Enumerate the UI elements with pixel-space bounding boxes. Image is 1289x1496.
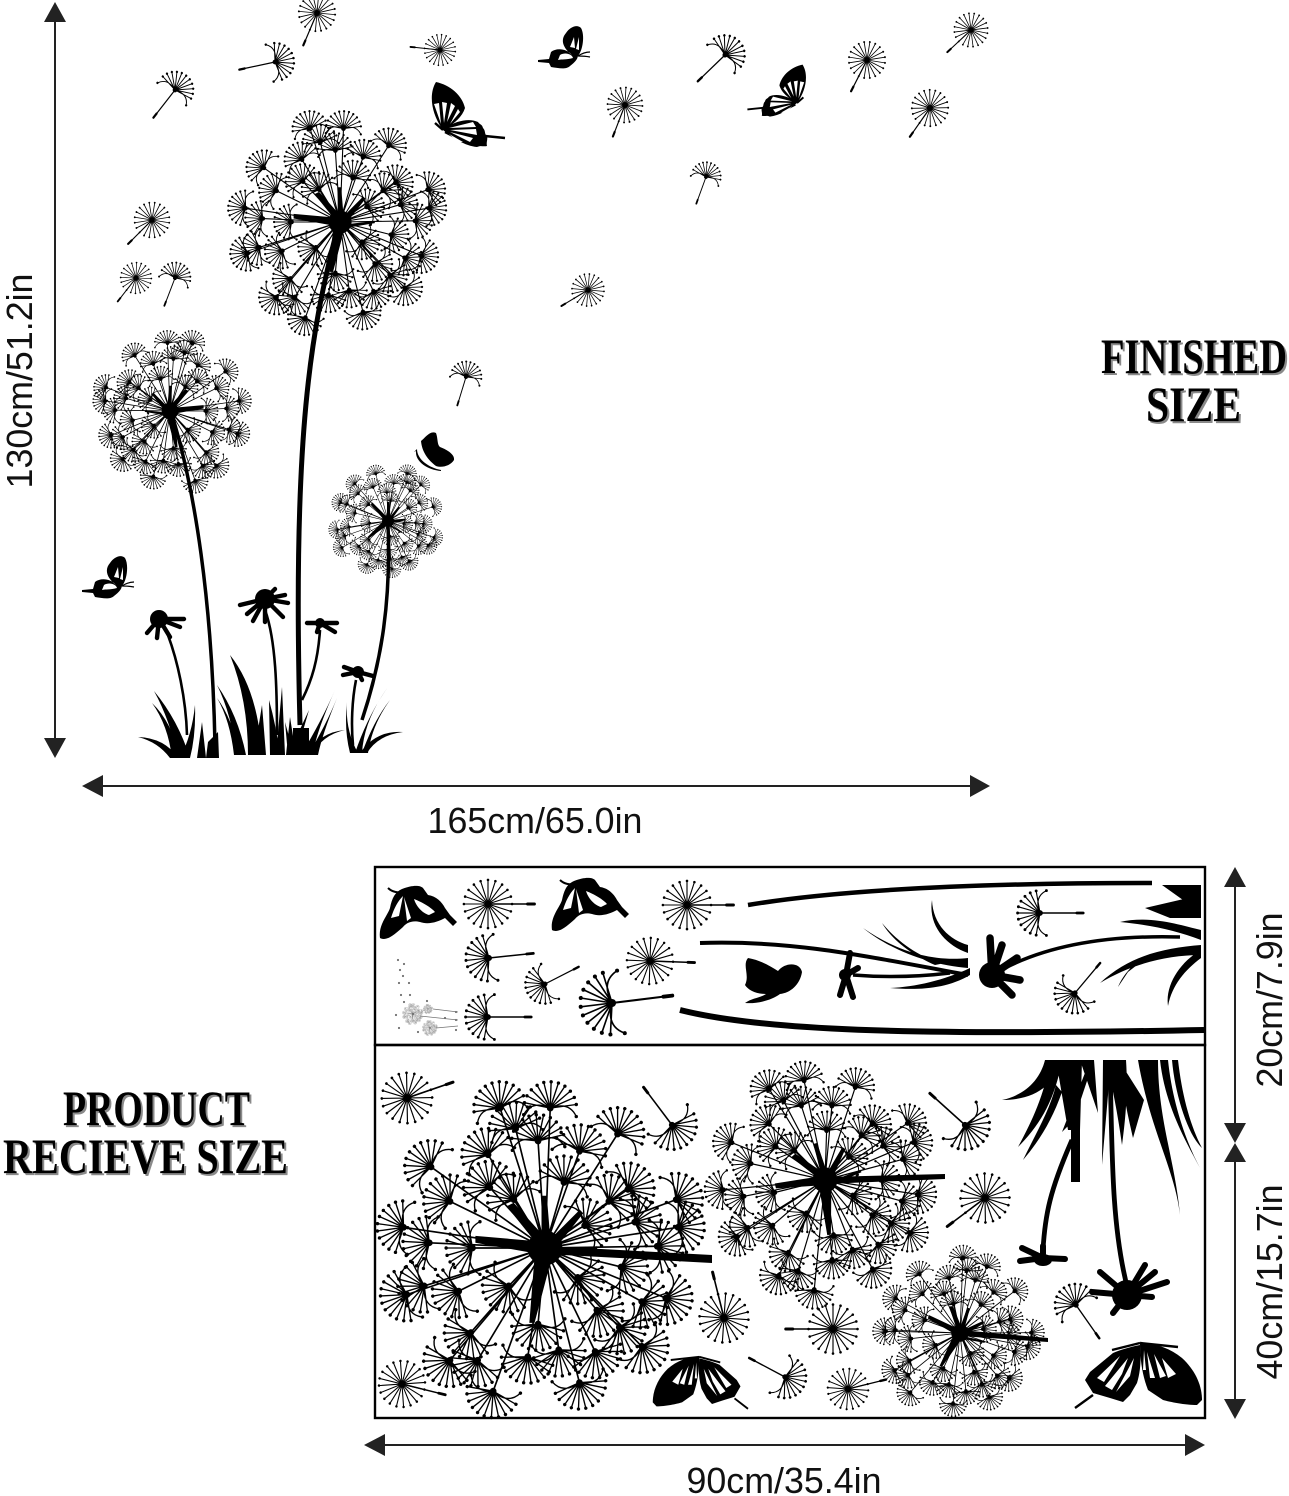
butterflies on upper sheet (380, 878, 802, 1003)
finished size heading (1101, 328, 1287, 432)
finished size horizontal arrow (82, 775, 990, 797)
small flowers with stems (147, 589, 373, 745)
sheet frame (375, 867, 1205, 1045)
grass clusters (138, 655, 403, 758)
dandelion stems (172, 238, 389, 745)
finished size heading: SIZE (1146, 376, 1241, 432)
seeds on upper sheet (464, 880, 1116, 1039)
grass on lower sheet (1002, 1060, 1202, 1215)
label 20cm: 20cm/7.9in (1250, 912, 1289, 1088)
product receive size heading: RECIEVE SIZE (3, 1128, 288, 1184)
product vertical arrow 20cm (1224, 867, 1246, 1143)
long stems on upper sheet (680, 883, 1204, 1032)
seeds on lower sheet (374, 1058, 1116, 1417)
large dandelion head on lower sheet (373, 1075, 712, 1425)
small dandelion head on lower sheet (848, 1221, 1068, 1446)
panel: lower sheet (373, 1030, 1205, 1446)
sheet frame (375, 1045, 1205, 1418)
product receive size heading (3, 1080, 288, 1184)
butterflies (82, 26, 806, 598)
product vertical arrow 40cm (1224, 1143, 1246, 1419)
tiny grey preview sticker (396, 960, 458, 1036)
butterflies on lower sheet (653, 1343, 1202, 1409)
flowers on lower sheet (1020, 1060, 1167, 1313)
finished size width label: 165cm/65.0in (428, 801, 642, 841)
small dandelion head (303, 437, 470, 604)
product receive size heading: PRODUCT (63, 1080, 250, 1136)
finished size height label: 130cm/51.2in (0, 274, 40, 488)
finished size vertical arrow (44, 2, 66, 758)
panel: upper sheet (375, 867, 1205, 1045)
product horizontal arrow (364, 1434, 1205, 1456)
finished size artwork (82, 0, 995, 758)
flowers and grass on upper sheet (839, 885, 1201, 1006)
label 40cm: 40cm/15.7in (1250, 1184, 1289, 1380)
medium dandelion head on lower sheet (676, 1030, 970, 1334)
large dandelion head (226, 107, 450, 340)
flying seeds (106, 0, 995, 410)
medium dandelion head (90, 327, 253, 496)
